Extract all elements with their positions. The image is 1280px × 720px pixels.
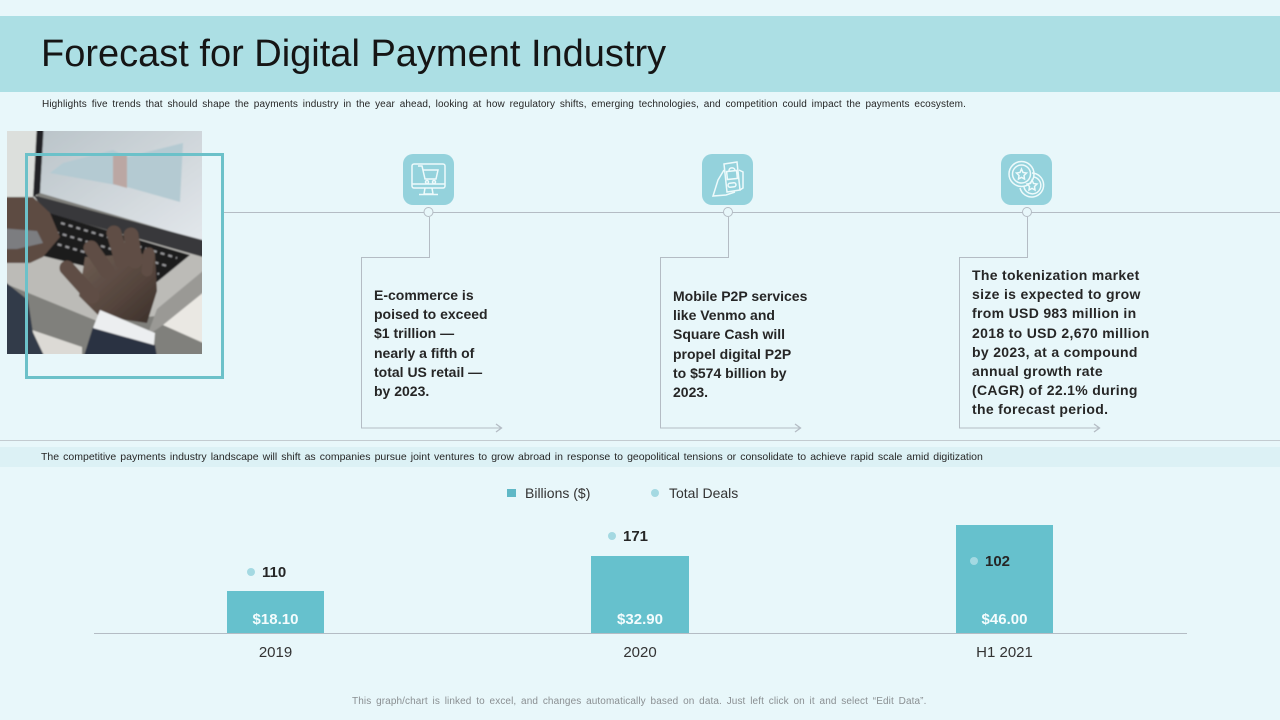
icon: mobile payment in hand bbox=[702, 154, 753, 205]
photo: hands typing on laptop bbox=[7, 131, 202, 354]
text: mobile P2P bbox=[673, 288, 807, 400]
legend: billions bbox=[507, 489, 516, 497]
title band bbox=[0, 16, 1280, 92]
category label: 2019: 2019 bbox=[259, 644, 292, 661]
legend: Billions ($) bbox=[525, 485, 590, 501]
bar value: 2019: $18.10 bbox=[253, 611, 298, 628]
text: e-commerce: by 2023. bbox=[374, 383, 429, 399]
text: tokenization: the forecast period. bbox=[972, 401, 1108, 417]
text: mobile P2P: propel digital P2P bbox=[673, 346, 791, 362]
text: mobile P2P: Square Cash will bbox=[673, 326, 785, 342]
text: tokenization: 2018 to USD 2,670 million bbox=[972, 325, 1150, 341]
category label: H1 2021: H1 2021 bbox=[976, 644, 1033, 661]
legend: total deals bbox=[651, 489, 659, 497]
deal value: 2019: 110 bbox=[262, 564, 286, 581]
legend: Total Deals bbox=[669, 485, 738, 501]
bar H1 2021 bbox=[956, 525, 1053, 633]
deal marker: H1 2021 bbox=[970, 557, 978, 565]
text: tokenization: by 2023, at a compound bbox=[972, 344, 1138, 360]
text: e-commerce: E-commerce is bbox=[374, 287, 474, 303]
deal value: 2020: 171 bbox=[623, 528, 648, 545]
text: mobile P2P: to $574 billion by bbox=[673, 365, 787, 381]
category label: 2020: 2020 bbox=[623, 644, 657, 661]
text: tokenization: size is expected to grow bbox=[972, 286, 1141, 302]
text: e-commerce: total US retail — bbox=[374, 364, 482, 380]
legend bbox=[507, 485, 738, 501]
deal marker: 2020 bbox=[608, 532, 616, 540]
text: e-commerce: $1 trillion — bbox=[374, 325, 454, 341]
text: tokenization: annual growth rate bbox=[972, 363, 1103, 379]
text: e-commerce: poised to exceed bbox=[374, 306, 488, 322]
bar 2019 bbox=[227, 591, 324, 633]
text: tokenization: from USD 983 million in bbox=[972, 305, 1136, 321]
bar value: 2020: $32.90 bbox=[617, 611, 663, 628]
footnote: This graph/chart is linked to excel, and changes automatically based on data. Just left click on it and select “Edit Data”. bbox=[352, 696, 926, 707]
text: mobile P2P: 2023. bbox=[673, 384, 708, 400]
intro text: Highlights five trends that should shape the payments industry in the year ahead, looking at how regulatory shifts, emerging technologies, and competition could impact the payments ecosystem. bbox=[42, 99, 966, 110]
bar chart bbox=[227, 525, 1053, 661]
text: tokenization bbox=[972, 267, 1150, 417]
text: e-commerce bbox=[374, 287, 488, 399]
icon: tokens bbox=[1001, 154, 1052, 205]
icon: shopping cart on monitor bbox=[403, 154, 454, 205]
text: mobile P2P: Mobile P2P services bbox=[673, 288, 807, 304]
deal marker: 2019 bbox=[247, 568, 255, 576]
bar 2020 bbox=[591, 556, 689, 633]
bar value: H1 2021: $46.00 bbox=[982, 611, 1027, 628]
text: mobile P2P: like Venmo and bbox=[673, 307, 775, 323]
photo frame bbox=[25, 153, 224, 379]
sub-heading text: The competitive payments industry landscape will shift as companies pursue joint ventures to grow abroad in response to geopolitical tensions or consolidate to achieve rapid scale amid digitization bbox=[41, 451, 983, 463]
text: tokenization: The tokenization market bbox=[972, 267, 1140, 283]
title: Forecast for Digital Payment Industry bbox=[41, 33, 666, 75]
text: tokenization: (CAGR) of 22.1% during bbox=[972, 382, 1138, 398]
sub-heading strip bbox=[0, 447, 1280, 467]
text: e-commerce: nearly a fifth of bbox=[374, 345, 474, 361]
deal value: H1 2021: 102 bbox=[985, 553, 1010, 570]
